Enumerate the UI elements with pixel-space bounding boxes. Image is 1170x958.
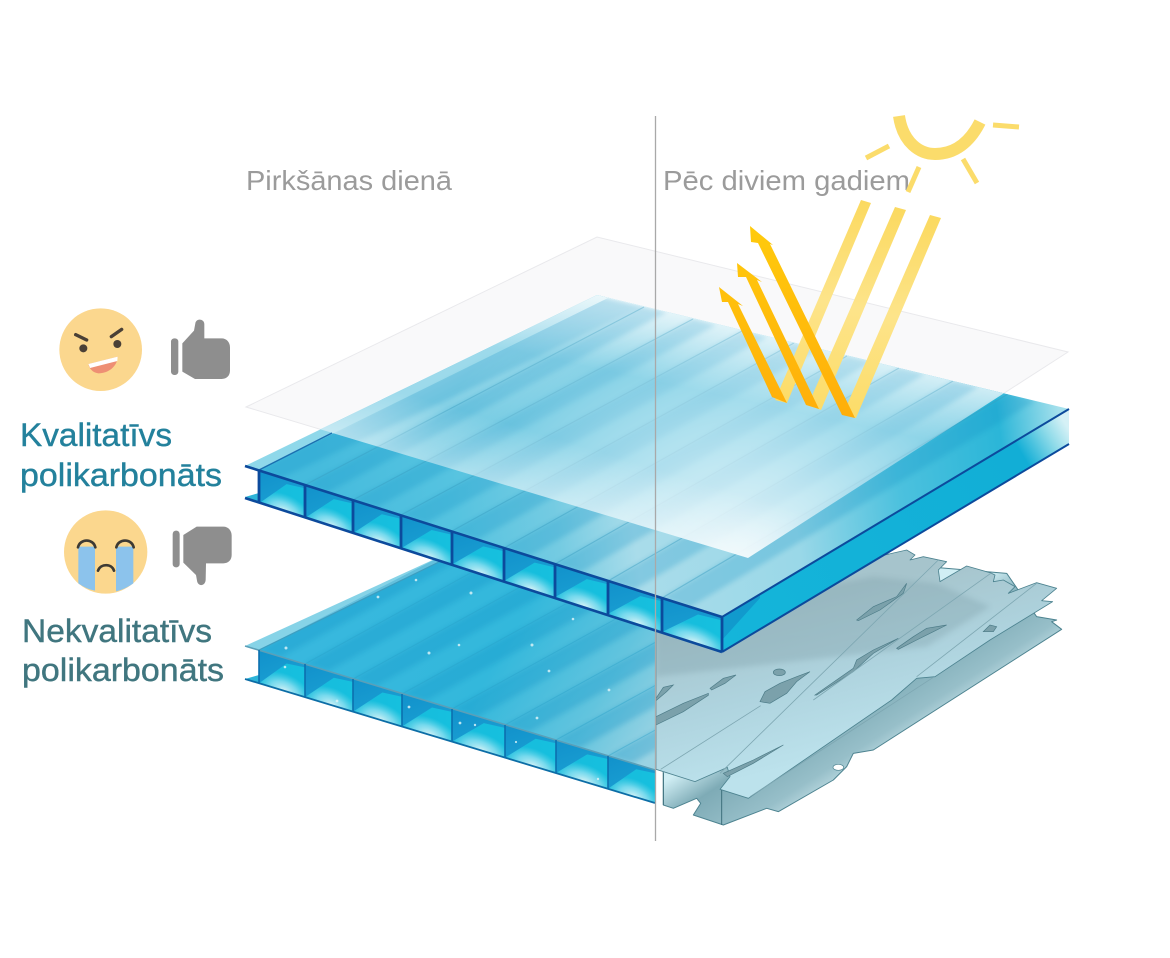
icon: sun [866,116,1019,192]
right side wall [722,409,1069,652]
quality polycarbonate sheet [245,295,1069,652]
cells of quality sheet [245,470,722,651]
heading: after two years: Pēc diviem gadiem [663,165,910,196]
rib lines on damaged face [661,560,1037,797]
front rib posts [663,773,722,825]
top face of low quality sheet [259,560,655,770]
incoming sun rays [775,200,941,418]
bubbles defects [284,579,610,780]
lip of quality sheet [245,295,625,470]
tears and cracks [656,583,997,777]
divider line [654,116,656,841]
reflected arrows [719,226,855,418]
top face seen through film [320,295,1004,558]
label: low quality polycarbonate: Nekvalitatīvs [22,613,212,649]
top face of damaged sheet [656,550,1057,798]
top face [259,298,1069,617]
icon: thumbs down [173,527,232,585]
lip of low quality sheet [245,558,445,650]
low quality polycarbonate sheet: damaged half [656,550,1062,825]
hole in damaged sheet [833,764,844,770]
label: low quality polycarbonate [22,613,224,688]
low quality polycarbonate sheet: new half [244,560,655,804]
icon: thumbs up [171,320,230,379]
film whitening overlays [320,304,988,558]
label: low quality polycarbonate: polikarbonāts [22,652,224,688]
label: quality polycarbonate: Kvalitatīvs [20,417,172,453]
transparent UV film layer [246,237,1068,558]
heading: purchase day: Pirkšānas dienā [246,165,452,196]
inner edge of low quality sheet [259,561,441,650]
label: quality polycarbonate [20,417,222,493]
label: quality polycarbonate: polikarbonāts [20,457,222,493]
icon: happy face [59,308,142,391]
underside and front walls of damaged sheet [656,563,1062,825]
icon: crying face [64,510,147,594]
inner back edge line [259,433,332,470]
cells of low quality sheet [245,650,655,803]
shadow bands [259,296,1035,607]
navy outlines of quality sheet [245,409,1069,652]
rib lines on top face [305,307,1008,598]
edges of low quality sheet [245,646,655,803]
shadow on damaged face [656,577,990,677]
